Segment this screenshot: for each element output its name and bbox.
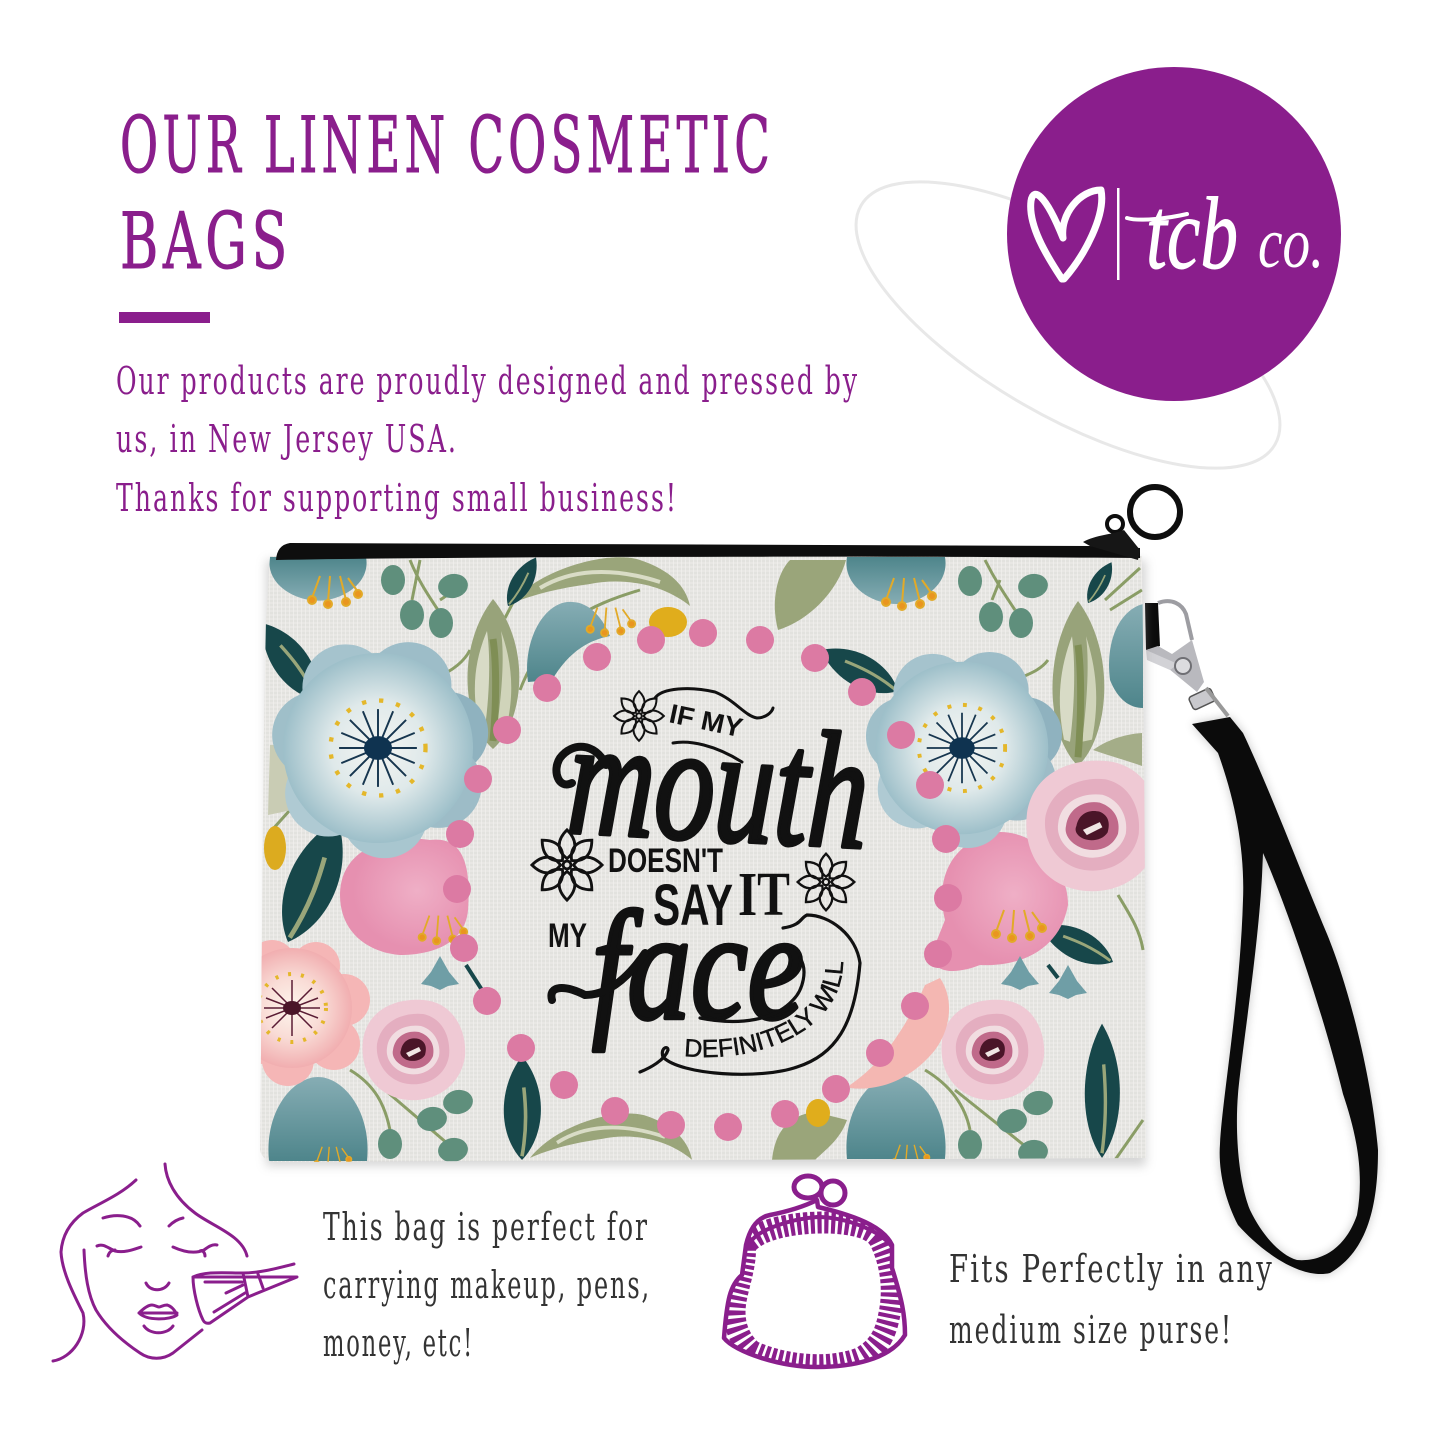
intro text block: Thanks for supporting small business! xyxy=(116,476,678,520)
intro text block: us, in New Jersey USA. xyxy=(116,417,458,461)
bag quote lettering xyxy=(530,685,873,1076)
title: BAGS xyxy=(120,197,292,287)
bag quote lettering: MY xyxy=(548,917,587,955)
zipper xyxy=(276,543,1140,560)
product: cosmetic bag xyxy=(260,484,1183,1170)
intro text block xyxy=(116,359,859,520)
bag quote lettering: SAY xyxy=(653,873,733,938)
icon: heart xyxy=(1031,190,1102,279)
wrist strap xyxy=(1145,601,1378,1274)
text: makeup note: carrying makeup, pens, xyxy=(323,1263,651,1307)
bag quote lettering: IT xyxy=(738,861,790,929)
title: OUR LINEN COSMETIC xyxy=(120,101,774,191)
icon: purse xyxy=(724,1176,905,1367)
bag quote lettering: DEFINITELY WILL xyxy=(686,962,844,1058)
text: purse note: Fits Perfectly in any xyxy=(949,1247,1274,1291)
logo badge xyxy=(1007,67,1341,401)
logo orbit ellipse xyxy=(816,127,1320,523)
text: makeup note: This bag is perfect for xyxy=(323,1205,649,1249)
logo badge: tcb xyxy=(1146,177,1238,291)
title xyxy=(120,101,774,287)
pink bead ring xyxy=(443,619,962,1141)
clasp xyxy=(1145,601,1228,716)
text: purse note xyxy=(949,1247,1274,1352)
text: purse note: medium size purse! xyxy=(949,1308,1233,1352)
bag quote lettering: mouth xyxy=(564,685,873,884)
bag quote lettering: IF MY xyxy=(667,699,745,743)
text: makeup note: money, etc! xyxy=(323,1321,474,1365)
text: makeup note xyxy=(323,1205,651,1365)
zipper pull and ring xyxy=(1083,487,1180,560)
title underline xyxy=(119,312,210,323)
intro text block: Our products are proudly designed and pressed by xyxy=(116,359,859,403)
bag quote lettering: face xyxy=(592,880,804,1052)
icon: face with makeup brush xyxy=(53,1164,297,1361)
bag quote lettering: DOESN'T xyxy=(608,842,723,880)
logo badge: co. xyxy=(1258,203,1324,283)
floral wreath xyxy=(232,552,1160,1169)
